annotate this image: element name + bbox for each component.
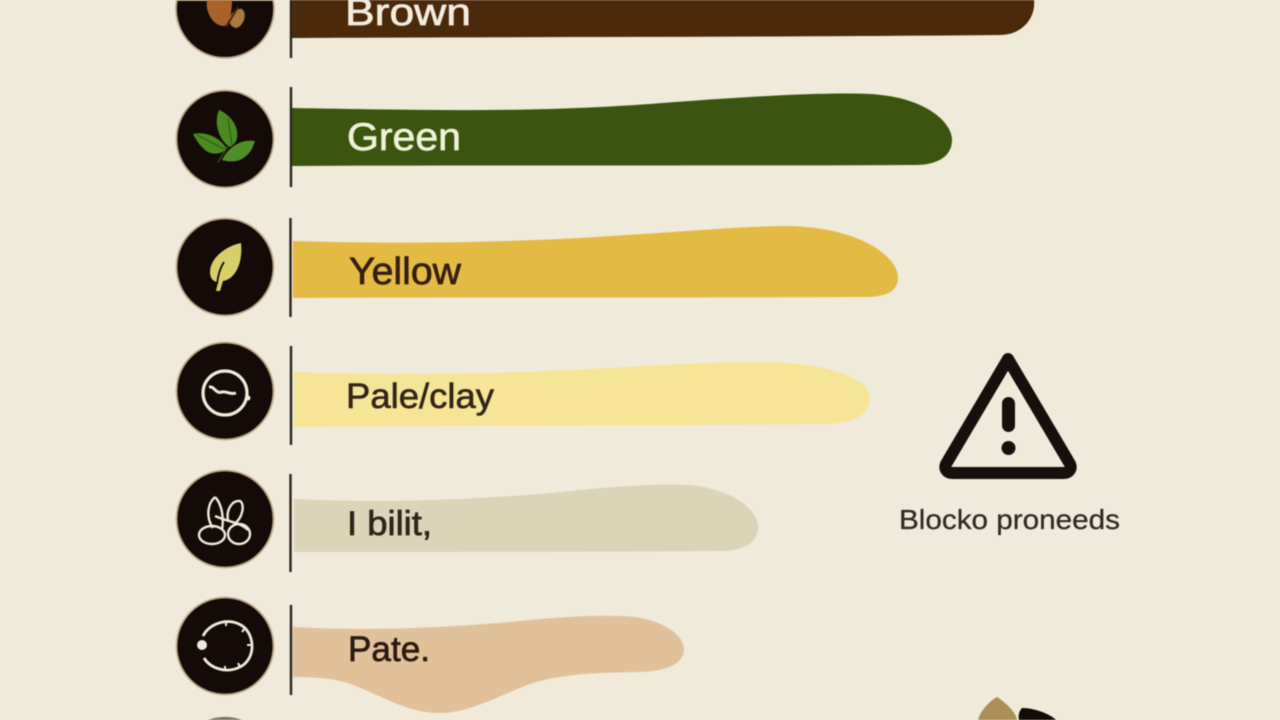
icon: yellow leaf (176, 218, 274, 316)
callout: warning (899, 359, 1120, 535)
bar: Brown (292, 0, 1034, 38)
row: garbled label (176, 470, 758, 572)
icon: broken ring (176, 598, 274, 694)
icon: brown beans (176, 0, 274, 58)
bar: Pale/clay (294, 362, 870, 427)
row: Yellow (176, 218, 898, 317)
icon: partial next circle (208, 717, 242, 720)
icon: warning triangle (945, 359, 1071, 473)
row: Brown (176, 0, 1034, 58)
label: warning text: Blocko proneeds (899, 504, 1120, 535)
row: Pate (176, 598, 684, 713)
label: Yellow: Yellow (349, 251, 462, 293)
bar: Green (292, 94, 952, 166)
icon: green leaves (176, 90, 274, 188)
row: Green (176, 87, 952, 188)
icon: bottom leaves (978, 697, 1056, 720)
label: garbled: I bilit, (347, 505, 432, 543)
label: Green: Green (347, 116, 461, 159)
row: Pale/clay (176, 342, 870, 445)
icon: seed outlines (176, 470, 274, 568)
label: Pale/clay: Pale/clay (346, 377, 495, 416)
bar: beige (294, 485, 758, 552)
bar: Yellow (293, 226, 898, 298)
icon: clock ring (176, 342, 274, 440)
label: Pate: Pate. (348, 630, 430, 669)
bar: Pate (293, 616, 684, 713)
